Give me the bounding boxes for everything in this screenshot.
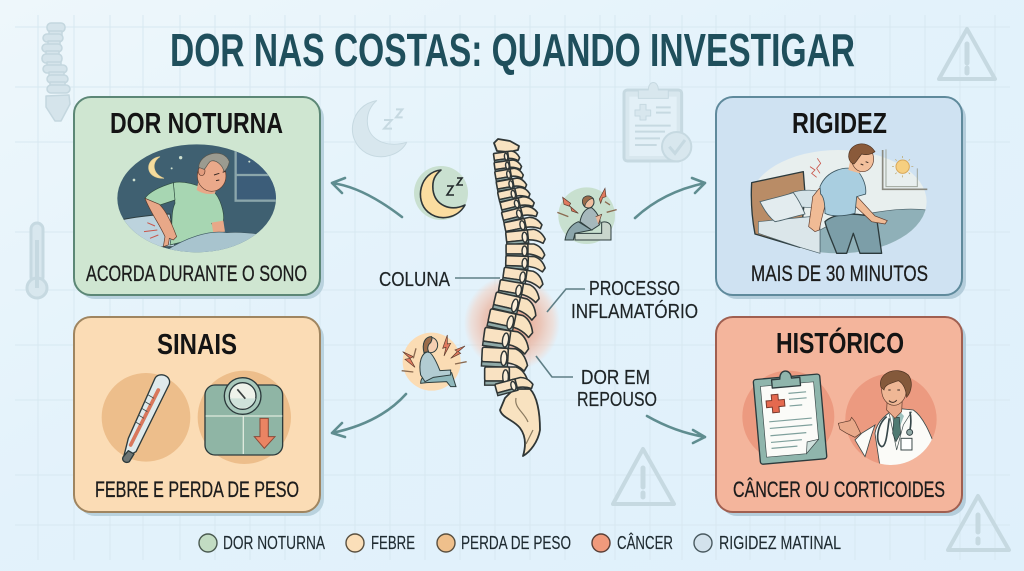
- illustration: stiff man on bed: [750, 144, 927, 255]
- icon: ghost thermometer: [27, 223, 47, 298]
- heading: rigidez: RIGIDEZ: [792, 108, 887, 140]
- legend item: dor noturna: [199, 533, 325, 553]
- label: processo inflamatorio: [547, 278, 698, 323]
- legend item: rigidez matinal: [694, 533, 841, 553]
- legend item: cancer: [592, 533, 673, 553]
- label: processo inflamatorio: PROCESSO: [589, 278, 680, 300]
- icon: ghost warning bottom right: [948, 496, 1009, 550]
- label: coluna: [379, 269, 500, 291]
- legend item: perda de peso: [437, 533, 571, 553]
- caption: mais de 30 minutos: MAIS DE 30 MINUTOS: [751, 261, 928, 286]
- caption: febre e perda de peso: FEBRE E PERDA DE PESO: [95, 477, 299, 502]
- icon: ghost clipboard: [624, 82, 691, 161]
- icon: thermometer: [102, 373, 190, 462]
- panel: rigidez: [716, 97, 966, 299]
- arrow: to rigidez: [635, 178, 705, 218]
- caption: acorda durante o sono: ACORDA DURANTE O SONO: [86, 261, 307, 286]
- legend item: perda de peso: PERDA DE PESO: [461, 533, 571, 553]
- heading: dor noturna: DOR NOTURNA: [110, 108, 283, 140]
- icon: moon with zzz: [414, 166, 468, 220]
- heading: historico: HISTÓRICO: [776, 326, 904, 360]
- panel: sinais: [74, 317, 324, 516]
- legend item: febre: [346, 533, 415, 553]
- label: dor em repouso: REPOUSO: [577, 389, 657, 411]
- icon: ghost warning top right: [939, 29, 995, 79]
- legend item: febre: FEBRE: [371, 533, 415, 553]
- arrow: to historico: [647, 416, 705, 443]
- legend item: cancer: CÂNCER: [617, 533, 673, 553]
- icon: ghost warning center bottom: [613, 449, 674, 504]
- label: coluna: COLUNA: [379, 269, 451, 291]
- icon: person with back pain: [557, 187, 617, 244]
- caption: cancer ou corticoides: CÂNCER OU CORTICOIDES: [733, 477, 945, 502]
- chart: spine: [464, 139, 560, 456]
- arrow: to sinais: [332, 394, 406, 437]
- legend: [199, 533, 841, 553]
- panel: dor noturna: [74, 97, 324, 299]
- icon: ghost moon: [352, 101, 407, 157]
- legend item: dor noturna: DOR NOTURNA: [223, 533, 325, 553]
- arrow: to dor noturna: [332, 178, 402, 217]
- label: processo inflamatorio: INFLAMATÓRIO: [571, 300, 698, 323]
- label: dor em repouso: DOR EM: [581, 367, 650, 389]
- heading: sinais: SINAIS: [157, 329, 237, 361]
- label: dor em repouso: [536, 356, 657, 411]
- icon: seated person in pain: [402, 333, 467, 391]
- icon: weight scale: [198, 371, 291, 464]
- inflammation glow: [464, 275, 560, 371]
- panel: historico: [716, 317, 966, 516]
- legend item: rigidez matinal: RIGIDEZ MATINAL: [719, 533, 841, 553]
- icon: clipboard: [742, 368, 834, 464]
- icon: doctor: [838, 371, 937, 470]
- illustration: man awake at night: [117, 144, 276, 252]
- icon: ghost spine: [42, 23, 70, 121]
